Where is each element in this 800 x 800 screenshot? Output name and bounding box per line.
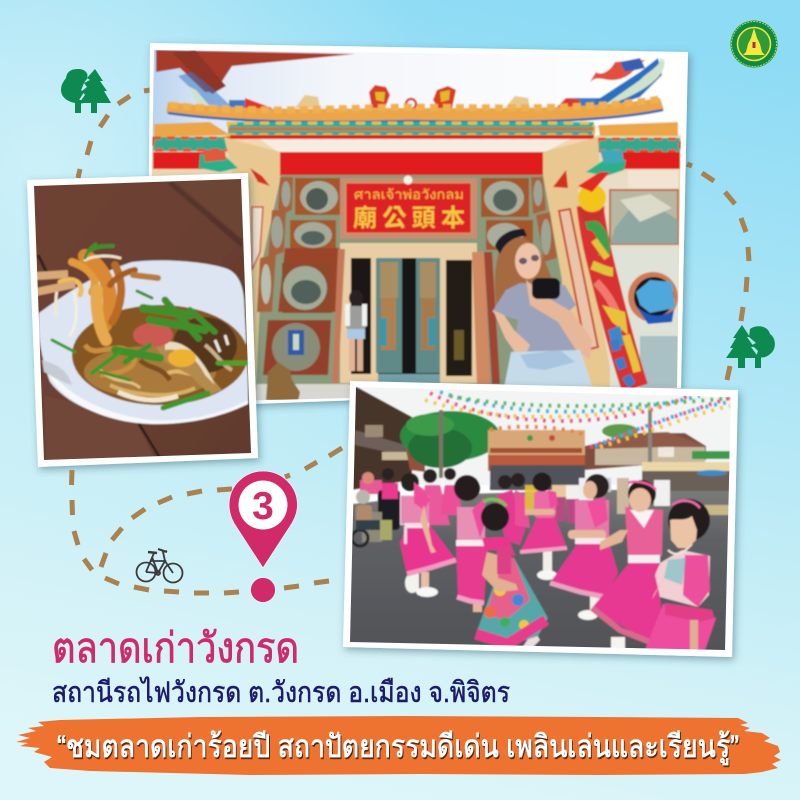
lion statue xyxy=(257,362,349,404)
stage banner xyxy=(488,430,585,490)
minced pork xyxy=(133,323,173,347)
left pillar xyxy=(224,137,280,390)
temple sign: 廟公頭本 xyxy=(353,198,465,233)
girl in doorway xyxy=(345,290,367,371)
tree xyxy=(400,410,500,478)
bunting flags xyxy=(425,392,730,447)
icon: bicycle xyxy=(136,549,182,582)
address: สถานีรถไฟวังกรด ต.วังกรด อ.เมือง จ.พิจิตร xyxy=(52,676,510,708)
photo: street dancers xyxy=(343,381,740,657)
red beams xyxy=(153,152,680,176)
road xyxy=(345,490,735,655)
underside of eave xyxy=(260,139,570,152)
omelette xyxy=(155,341,222,395)
noodles xyxy=(72,305,248,405)
photo: temple xyxy=(147,43,690,408)
temple sky xyxy=(152,50,679,136)
roof tiles xyxy=(154,98,678,137)
wall xyxy=(256,175,562,385)
dancer E xyxy=(550,474,618,620)
painted mural panels xyxy=(257,177,557,375)
temple wall base xyxy=(150,135,690,405)
dashed route: lower left to pin xyxy=(72,470,329,593)
girl with floral dress xyxy=(476,499,548,650)
icon: trees top left xyxy=(61,69,111,113)
frieze band xyxy=(153,122,680,152)
slogan: “ชมตลาดเก่าร้อยปี สถาปัตยกรรมดีเด่น เพลินเล่นและเรียนรู้” xyxy=(57,730,739,766)
background crowd xyxy=(360,468,670,545)
logo xyxy=(730,20,778,68)
lifted noodles xyxy=(56,256,158,340)
bowl xyxy=(39,260,248,423)
door side red panels xyxy=(332,249,500,385)
roof dragons xyxy=(229,58,665,114)
dragon pillar xyxy=(578,184,637,388)
dashed route: right side xyxy=(687,164,749,380)
chopsticks xyxy=(36,274,75,292)
temple sign: ศาลเจ้าพ่อวังกลม xyxy=(354,187,464,202)
wooden table xyxy=(30,175,255,465)
title: ตลาดเก่าวังกรด xyxy=(52,626,299,672)
wheelchair xyxy=(352,490,392,546)
right wall mural xyxy=(578,170,678,390)
dashed route: top left xyxy=(78,90,150,178)
door frame xyxy=(340,243,477,383)
lamp xyxy=(404,176,412,184)
right buildings xyxy=(585,410,732,491)
right red banner xyxy=(559,209,598,350)
dashed route: curve to dance photo xyxy=(101,448,342,567)
orange brush banner xyxy=(16,716,781,775)
photo: food xyxy=(27,173,258,467)
right pillar xyxy=(543,137,614,390)
eave beams xyxy=(156,50,355,112)
dancer A xyxy=(400,473,456,597)
icon: trees right xyxy=(726,325,775,368)
map pin 3 xyxy=(229,471,298,568)
dancer B xyxy=(454,475,488,612)
dancer F xyxy=(592,480,663,649)
map pin 3: 3 xyxy=(252,485,274,528)
woman with camera xyxy=(492,229,592,388)
map dot xyxy=(250,578,276,602)
left red banner xyxy=(252,207,263,270)
sky xyxy=(345,385,740,485)
left wooden buildings xyxy=(350,386,425,490)
girl in front xyxy=(645,499,716,650)
temple sign xyxy=(340,178,477,239)
capital decorations xyxy=(199,150,626,192)
dancer D xyxy=(520,472,567,580)
spring onions xyxy=(52,244,247,408)
